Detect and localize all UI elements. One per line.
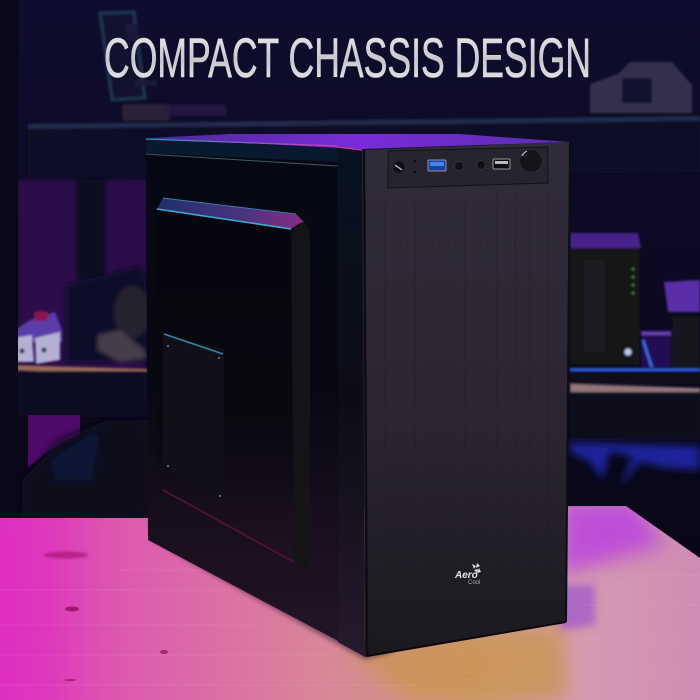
wooden table	[0, 500, 700, 700]
side panel top lip	[146, 139, 337, 166]
blue-lit bag right	[570, 442, 700, 488]
device on top shelf	[122, 104, 227, 121]
brushed metal lines	[385, 190, 548, 640]
front panel	[362, 142, 570, 657]
LEDs	[414, 160, 416, 173]
logo: Aero Cool: Aero	[454, 570, 478, 581]
top face	[148, 134, 569, 149]
USB 2 port	[493, 159, 510, 169]
left upright	[0, 0, 18, 518]
PC case	[146, 134, 570, 657]
magenta glow right of case	[560, 500, 665, 575]
bottom edge	[367, 622, 566, 656]
pink glow on left table	[0, 500, 70, 700]
white figures on lower-left shelf	[12, 311, 62, 364]
side panel front flange	[337, 147, 365, 657]
lower-left shelf board	[13, 365, 148, 417]
power button	[394, 162, 404, 172]
USB 3 port	[428, 160, 446, 171]
logo: Aero Cool	[454, 563, 481, 586]
embossed side panel	[156, 198, 310, 569]
logo: Aero Cool: Cool	[468, 580, 480, 586]
right NAS device	[570, 233, 641, 365]
ventilation grille on side panel	[163, 334, 224, 500]
right edge highlight	[566, 142, 570, 622]
side panel	[146, 140, 340, 642]
purple wall left	[18, 180, 146, 370]
reset dial	[520, 150, 542, 172]
audio jacks	[454, 160, 486, 170]
top shelf	[28, 116, 700, 180]
table wood grain and knots	[44, 552, 168, 681]
white figurine on top shelf	[590, 62, 692, 113]
right shelf with blue light	[570, 368, 700, 440]
magenta wall below shelf	[28, 415, 80, 468]
shadow under case	[150, 540, 395, 660]
dark bag below shelf	[22, 420, 148, 518]
purple keyboard-like object right	[641, 280, 700, 370]
camera gear on lower-left shelf	[66, 266, 150, 362]
front I/O panel	[388, 147, 548, 188]
orange patch below case	[350, 625, 568, 700]
grain lines	[0, 570, 700, 685]
pixel display on top shelf	[100, 12, 157, 100]
